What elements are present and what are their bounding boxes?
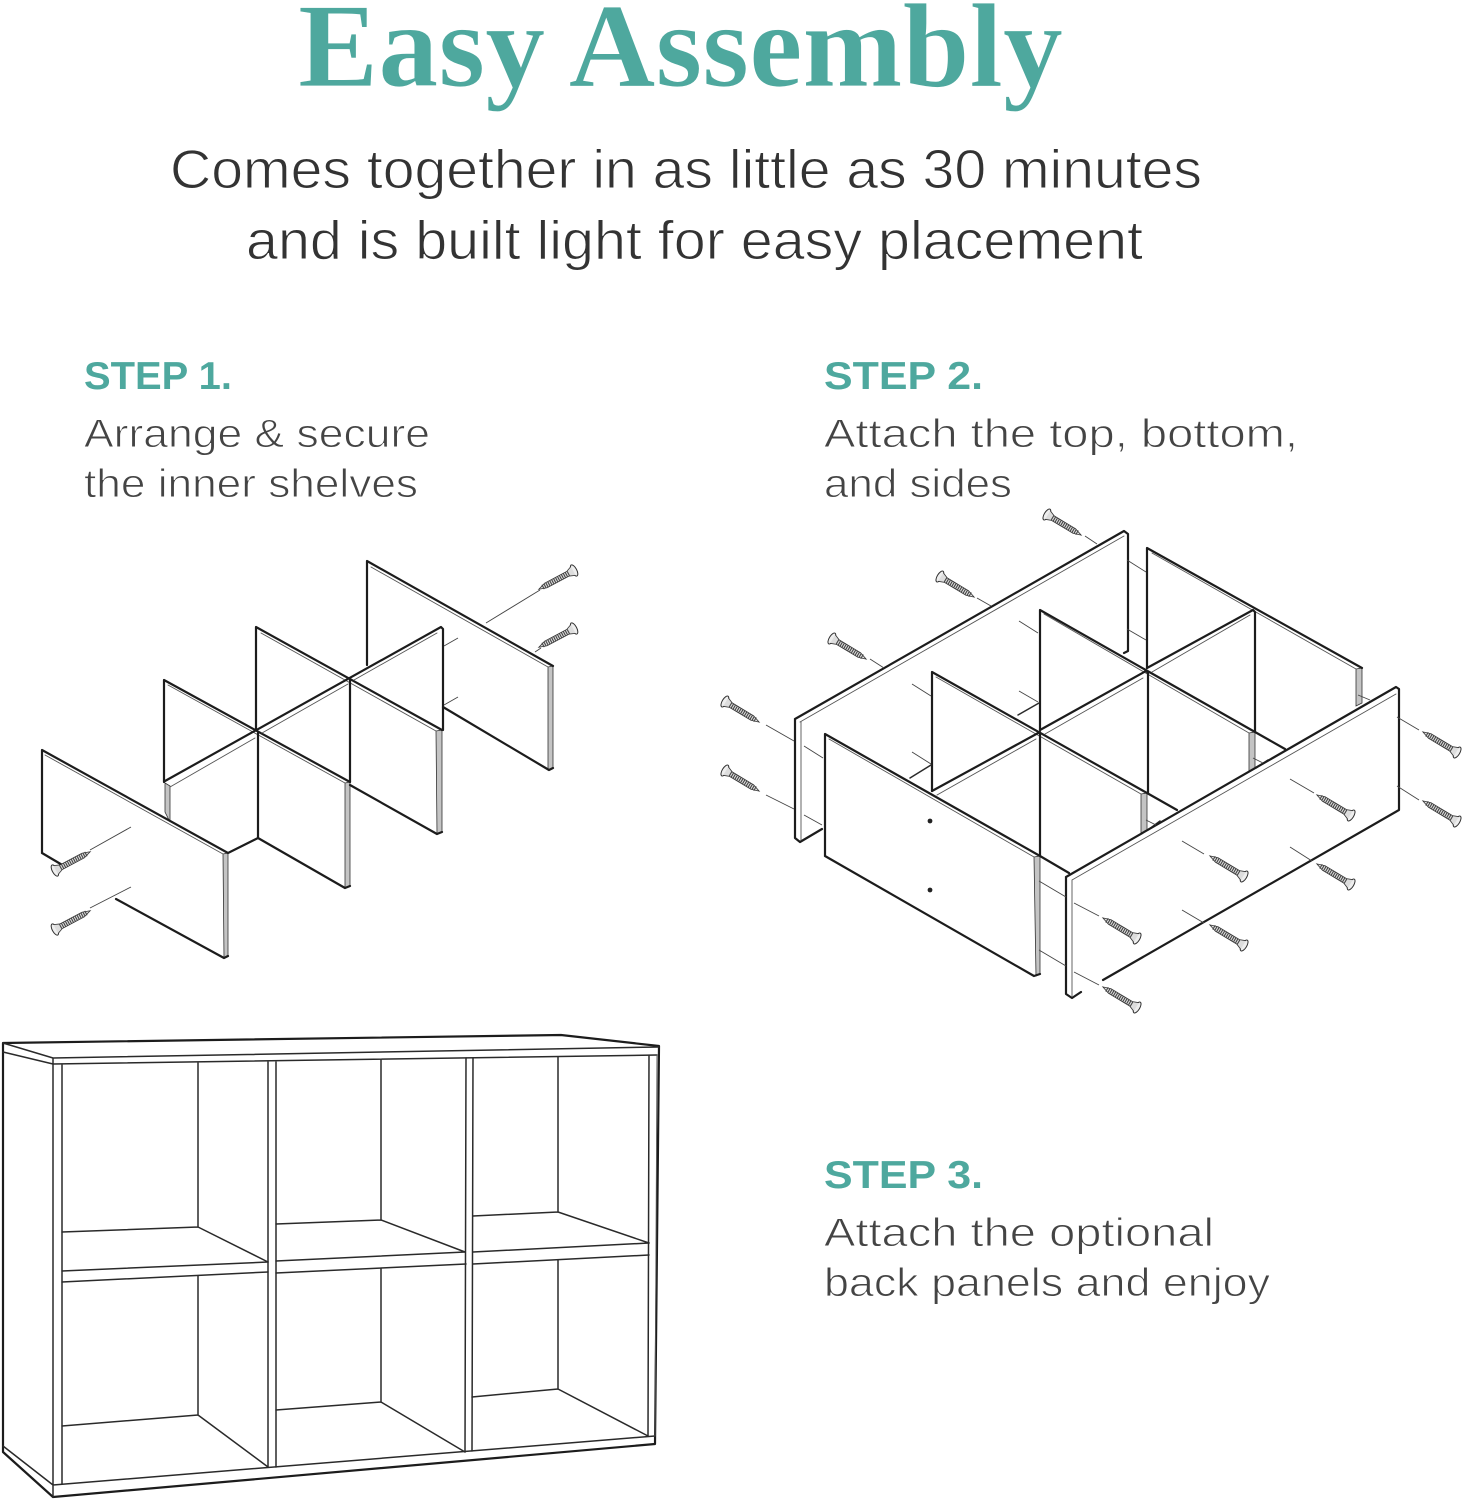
step 1 text	[84, 355, 430, 506]
outer frame	[3, 1035, 659, 1497]
step 1 text: STEP 1.	[84, 355, 232, 398]
front panel	[825, 734, 1069, 976]
step 2 text: STEP 2.	[824, 355, 983, 398]
step 3 text: back panels and enjoy	[824, 1261, 1270, 1305]
right front panel	[1066, 687, 1399, 998]
guide lines	[766, 536, 1419, 985]
step 3 text: STEP 3.	[824, 1154, 983, 1197]
step 1 diagram: inner shelves	[42, 561, 579, 958]
lower cubbies	[62, 1260, 648, 1467]
subtitle: Comes together in as little as 30 minutes	[170, 138, 1202, 200]
step 1 text: the inner shelves	[84, 462, 418, 506]
step 2 text: Attach the top, bottom,	[824, 412, 1298, 456]
middle cross panels	[910, 610, 1285, 856]
subtitle	[170, 138, 1202, 271]
step 2 text	[824, 355, 1298, 506]
step 1 text: Arrange & secure	[84, 412, 430, 456]
icon: screws	[50, 564, 579, 936]
guide lines	[90, 590, 541, 908]
step 3 diagram: finished shelf unit	[3, 1035, 659, 1497]
shelf	[62, 1243, 649, 1282]
dividers	[62, 1056, 649, 1484]
upper cubbies	[62, 1057, 649, 1262]
back-left long panel	[795, 531, 1128, 842]
icon: screws	[719, 508, 1463, 1014]
step 3 text: Attach the optional	[824, 1211, 1214, 1255]
back-right panel	[1147, 548, 1362, 706]
step 2 diagram: top, bottom and sides	[719, 508, 1463, 1014]
step 2 text: and sides	[824, 462, 1012, 506]
subtitle: and is built light for easy placement	[246, 209, 1143, 271]
step 3 text	[824, 1154, 1270, 1305]
